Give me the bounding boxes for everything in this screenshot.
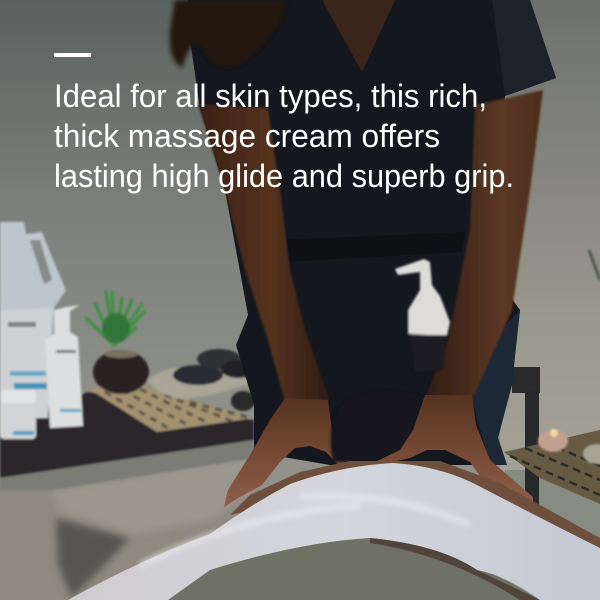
right mat — [504, 430, 600, 504]
right arm and hand — [331, 90, 543, 506]
hair — [170, 0, 288, 68]
side table with products — [0, 222, 255, 490]
left arm and hand — [198, 104, 352, 507]
product bottle in pocket — [395, 259, 450, 372]
wicker basket under table — [52, 458, 254, 598]
headline: thick massage cream offers — [54, 118, 440, 154]
headline — [54, 78, 514, 194]
cream jar — [0, 390, 36, 439]
brown skin strip under sheet — [370, 538, 540, 600]
therapist: uniform — [188, 0, 556, 465]
table top — [0, 392, 254, 478]
headline: Ideal for all skin types, this rich, — [54, 78, 487, 114]
plant — [86, 292, 149, 394]
white sheet — [68, 463, 600, 600]
candle — [538, 430, 568, 452]
pump bottle — [45, 305, 83, 428]
bamboo mat — [88, 385, 254, 432]
headline: lasting high glide and superb grip. — [54, 158, 514, 194]
stones on a dish — [147, 349, 255, 411]
floor band — [0, 440, 254, 490]
dish — [583, 444, 600, 464]
accent bar — [54, 53, 91, 57]
client back and bodies — [68, 461, 600, 600]
gallon jug — [0, 222, 66, 418]
grey blanket — [150, 530, 540, 600]
client head hair — [331, 391, 423, 462]
right side table and candle — [504, 250, 600, 506]
